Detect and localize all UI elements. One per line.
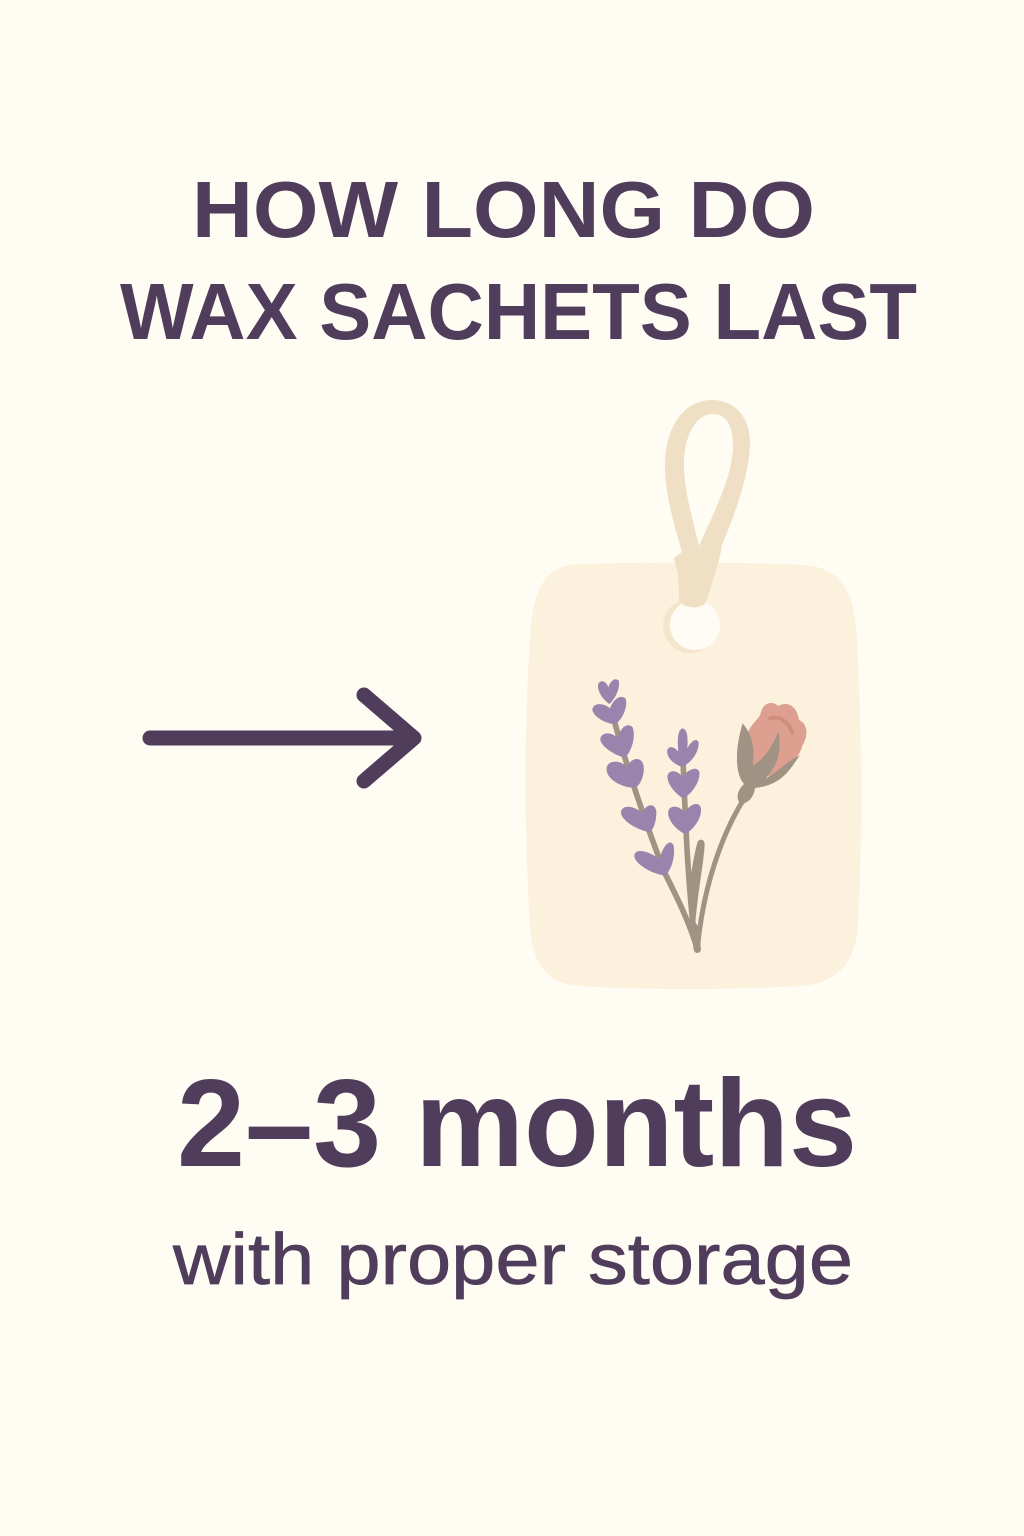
- stems: [615, 723, 742, 949]
- leaf: [688, 840, 705, 927]
- title: [120, 165, 917, 356]
- hole: [663, 599, 720, 653]
- rose bloom: [747, 703, 806, 778]
- rose sepals: [737, 723, 800, 804]
- icon: wax sachet: [526, 400, 861, 989]
- arrow: [150, 695, 414, 781]
- sachet body: [526, 563, 861, 989]
- flowers: [592, 679, 806, 949]
- title: WAX SACHETS LAST: [120, 267, 917, 356]
- title: HOW LONG DO: [192, 165, 815, 254]
- cord loop: [665, 400, 750, 607]
- result: duration: 2–3 months: [177, 1055, 857, 1193]
- subtext: storage note: with proper storage: [172, 1220, 853, 1300]
- lavender blossoms: [592, 679, 701, 876]
